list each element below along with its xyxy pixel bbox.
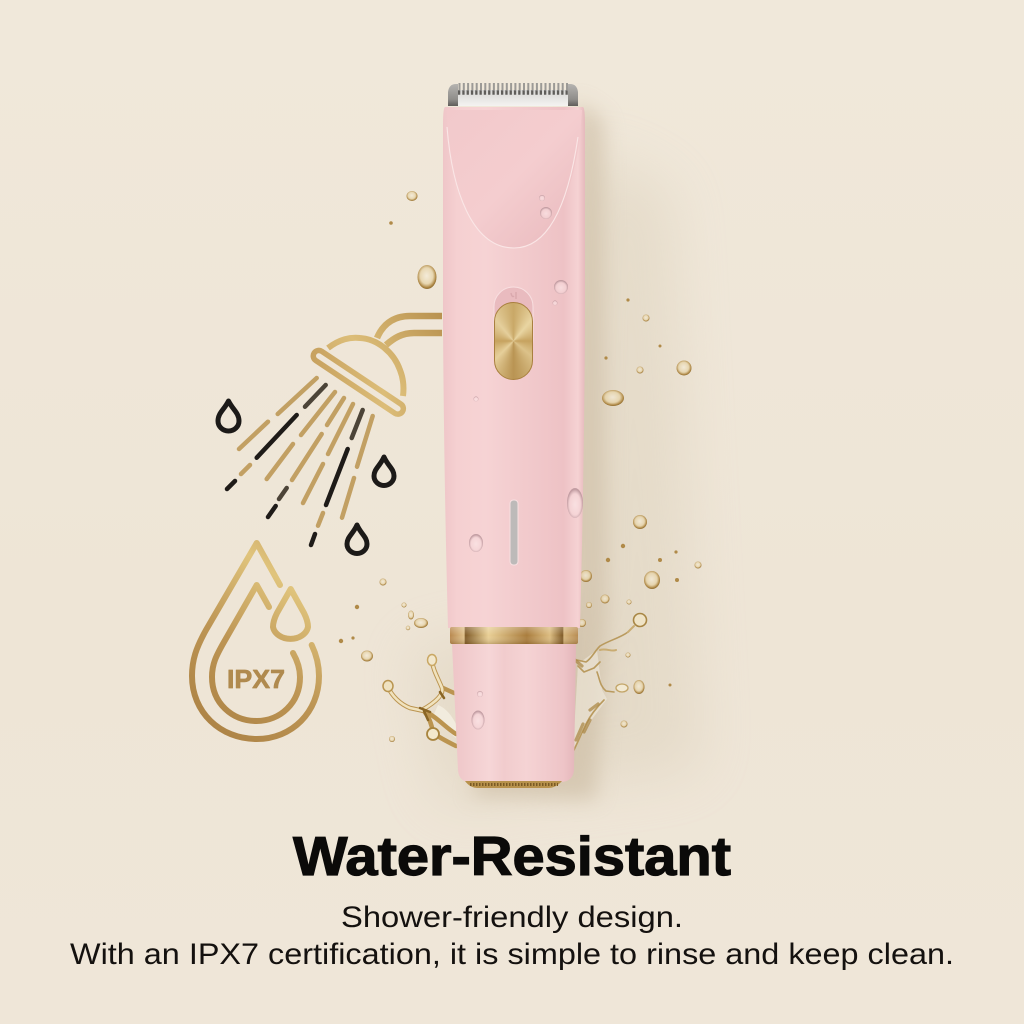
water splash right [573, 614, 646, 750]
head cap highlight [447, 127, 578, 248]
trimmer base [450, 627, 578, 788]
base water drops [477, 691, 483, 697]
trimmer soft ambient shadow [410, 100, 700, 805]
body water drops [469, 195, 583, 552]
icon: black water drops [218, 401, 394, 554]
head cap [447, 110, 582, 248]
IPX7 label: IPX7 [227, 664, 285, 694]
power symbol [511, 292, 516, 299]
gold switch [494, 302, 533, 380]
icon: IPX7 droplet badge [192, 543, 319, 739]
title: Water-Resistant [293, 825, 731, 887]
subtitle line 2: With an IPX7 certification, it is simple to rinse and keep clean. [70, 938, 954, 971]
scattered water droplets [339, 191, 702, 742]
gold ring [450, 627, 578, 644]
water splash left [383, 654, 456, 746]
icon: shower spray streaks [227, 378, 373, 545]
power switch recess [494, 287, 533, 359]
gold foot [465, 781, 562, 788]
icon: shower head [311, 316, 442, 416]
indicator slot [510, 500, 518, 565]
subtitle line 1: Shower-friendly design. [341, 901, 683, 934]
trimmer blade [448, 83, 578, 106]
trimmer body [443, 107, 585, 628]
